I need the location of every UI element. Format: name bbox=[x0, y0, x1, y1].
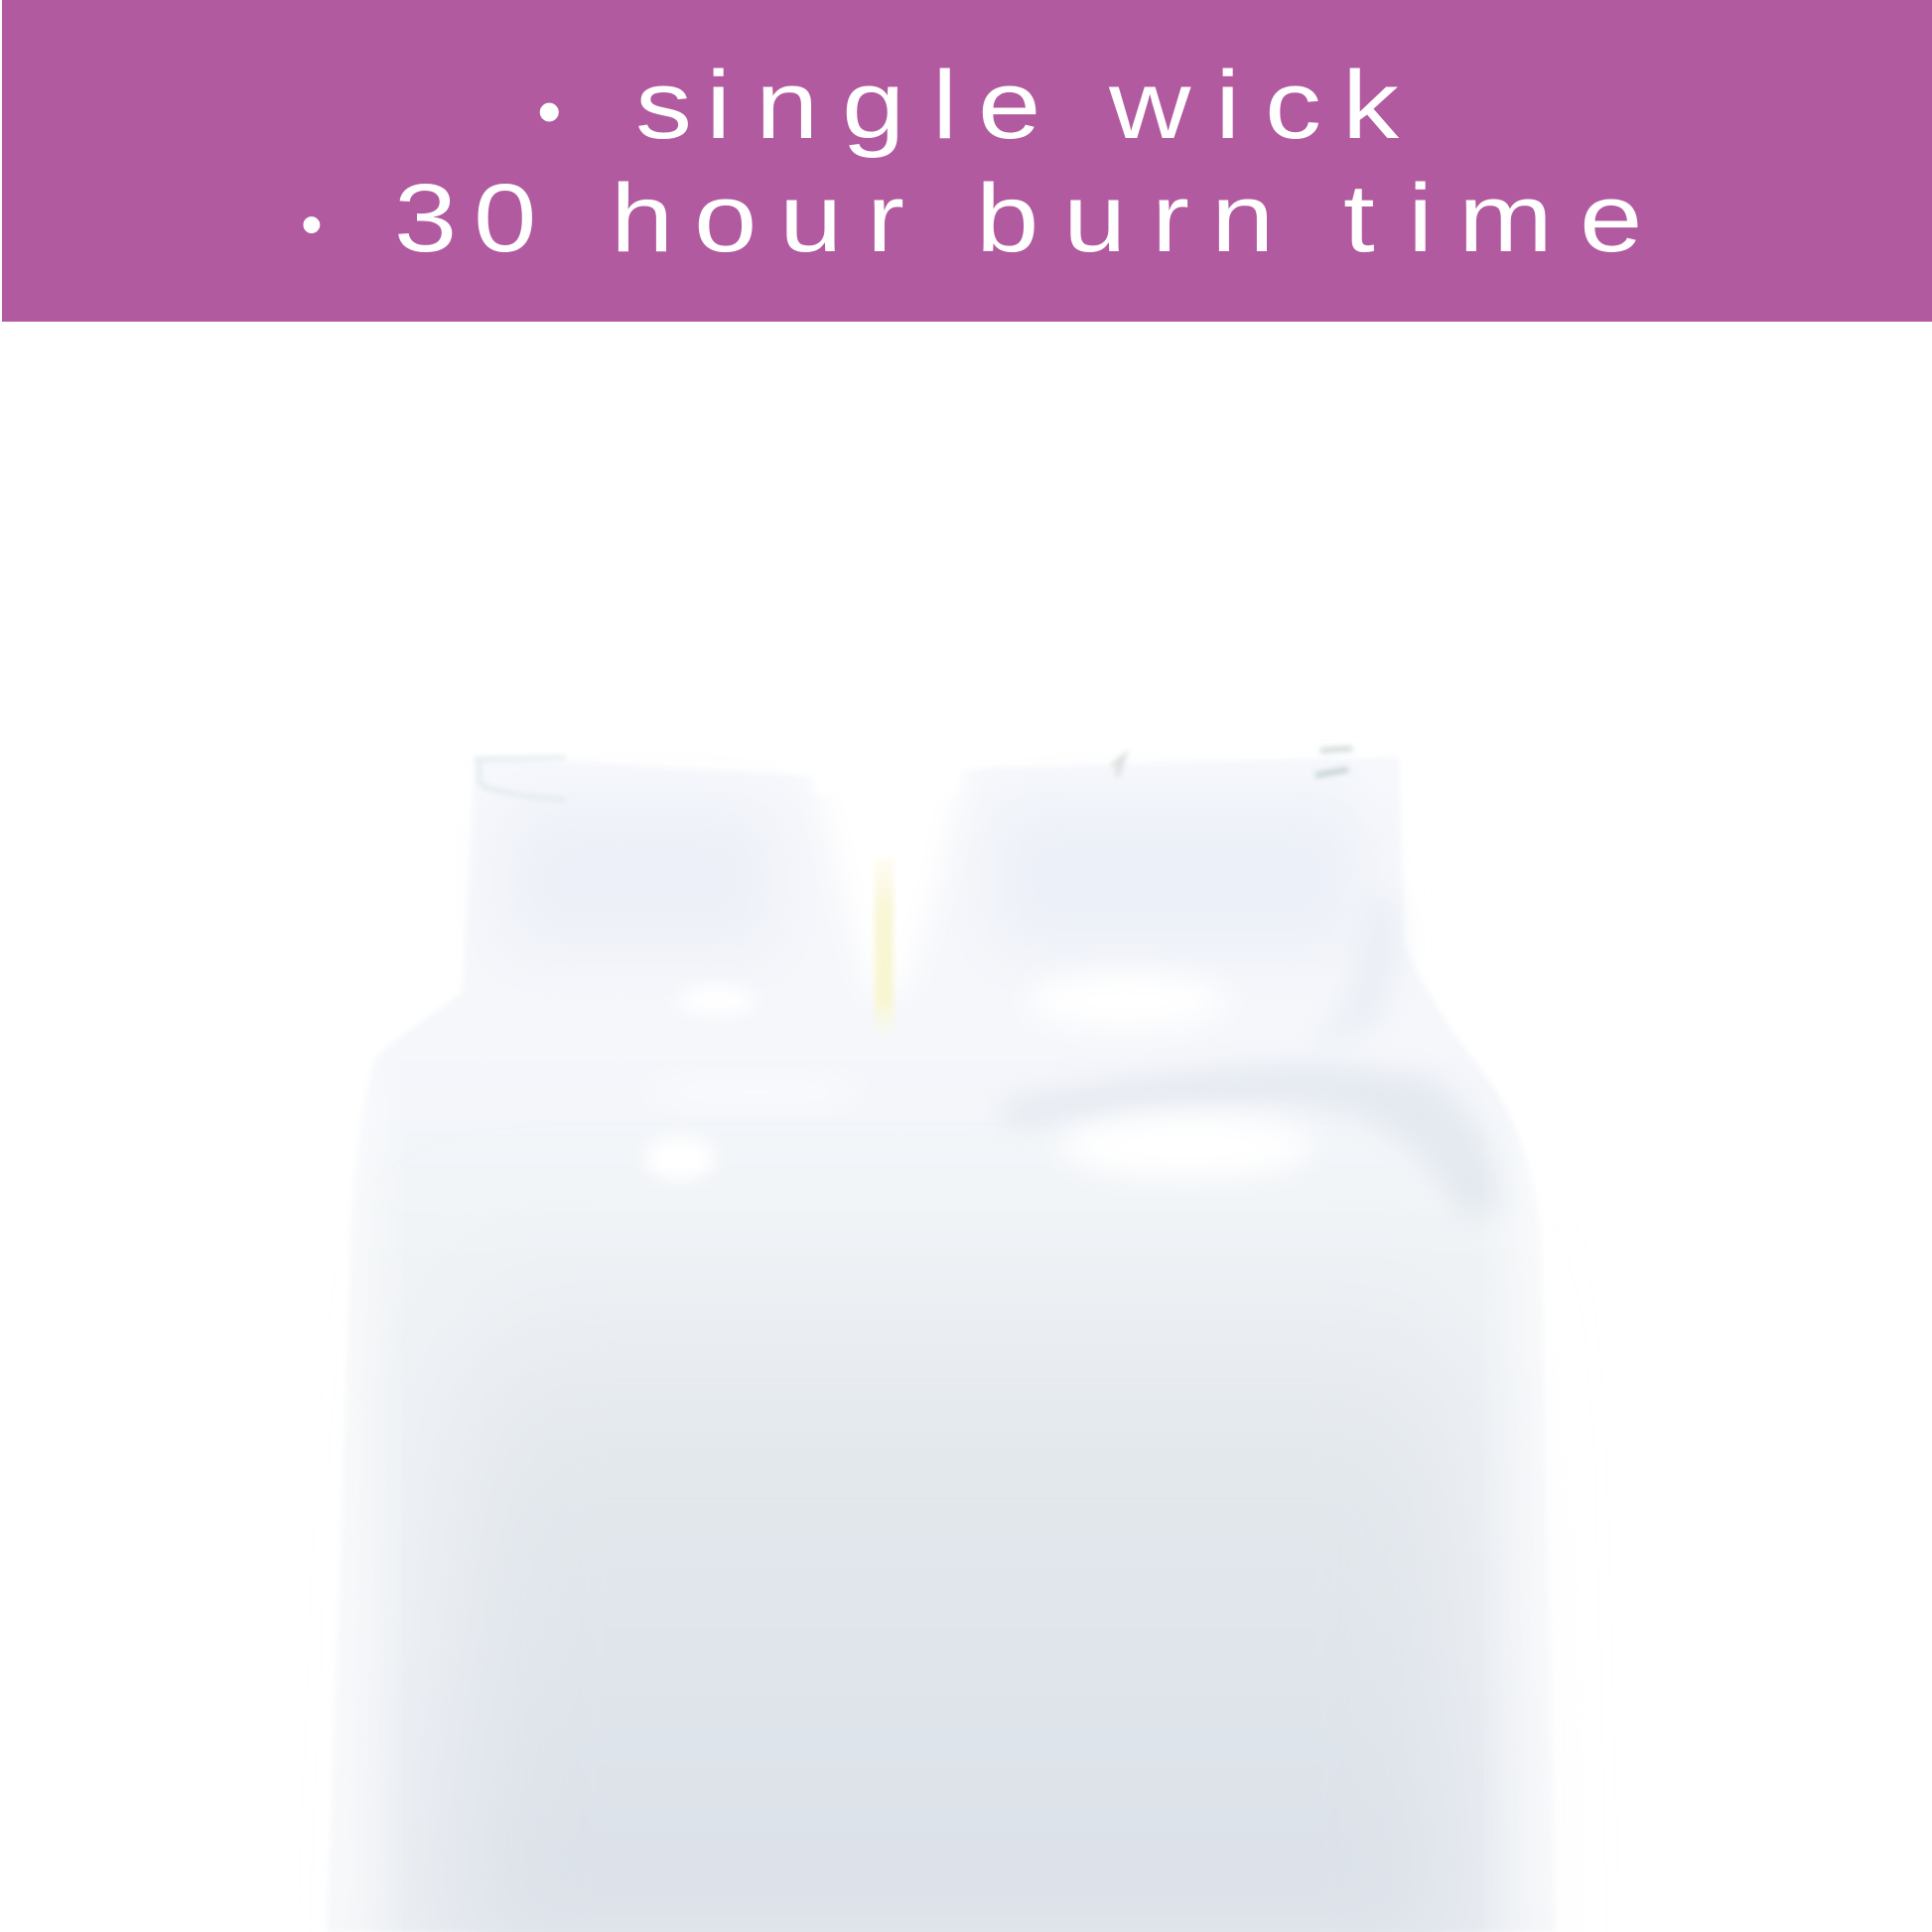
right neck edge shadow bbox=[1311, 894, 1402, 1052]
rim marks left bbox=[475, 758, 566, 800]
neck shading left bbox=[506, 804, 774, 953]
text: 30 hour burn time: 30 hour burn time bbox=[394, 165, 1642, 272]
left edge fade bbox=[298, 1062, 367, 1932]
glow around flame gap bbox=[804, 725, 973, 993]
highlight: mid band bbox=[645, 1078, 864, 1106]
bullet: first line: • bbox=[537, 72, 562, 150]
right edge fade bbox=[1519, 1122, 1588, 1932]
body shading bbox=[437, 1251, 1479, 1932]
banner: product features bbox=[2, 0, 1932, 322]
text: single wick: single wick bbox=[635, 52, 1400, 159]
shoulder shadow bbox=[1003, 1064, 1509, 1216]
highlight: neck left bbox=[679, 986, 755, 1014]
wick bbox=[875, 859, 894, 1035]
bullet: second line: • bbox=[301, 191, 323, 259]
highlight: lower left bbox=[646, 1137, 714, 1180]
jar body bbox=[327, 757, 1555, 1932]
highlight: neck right bbox=[1028, 973, 1226, 1029]
highlight: lower right bbox=[1062, 1115, 1311, 1178]
neck shading right bbox=[993, 804, 1360, 953]
rim marks right bbox=[1112, 749, 1352, 776]
candle jar bbox=[298, 725, 1588, 1932]
